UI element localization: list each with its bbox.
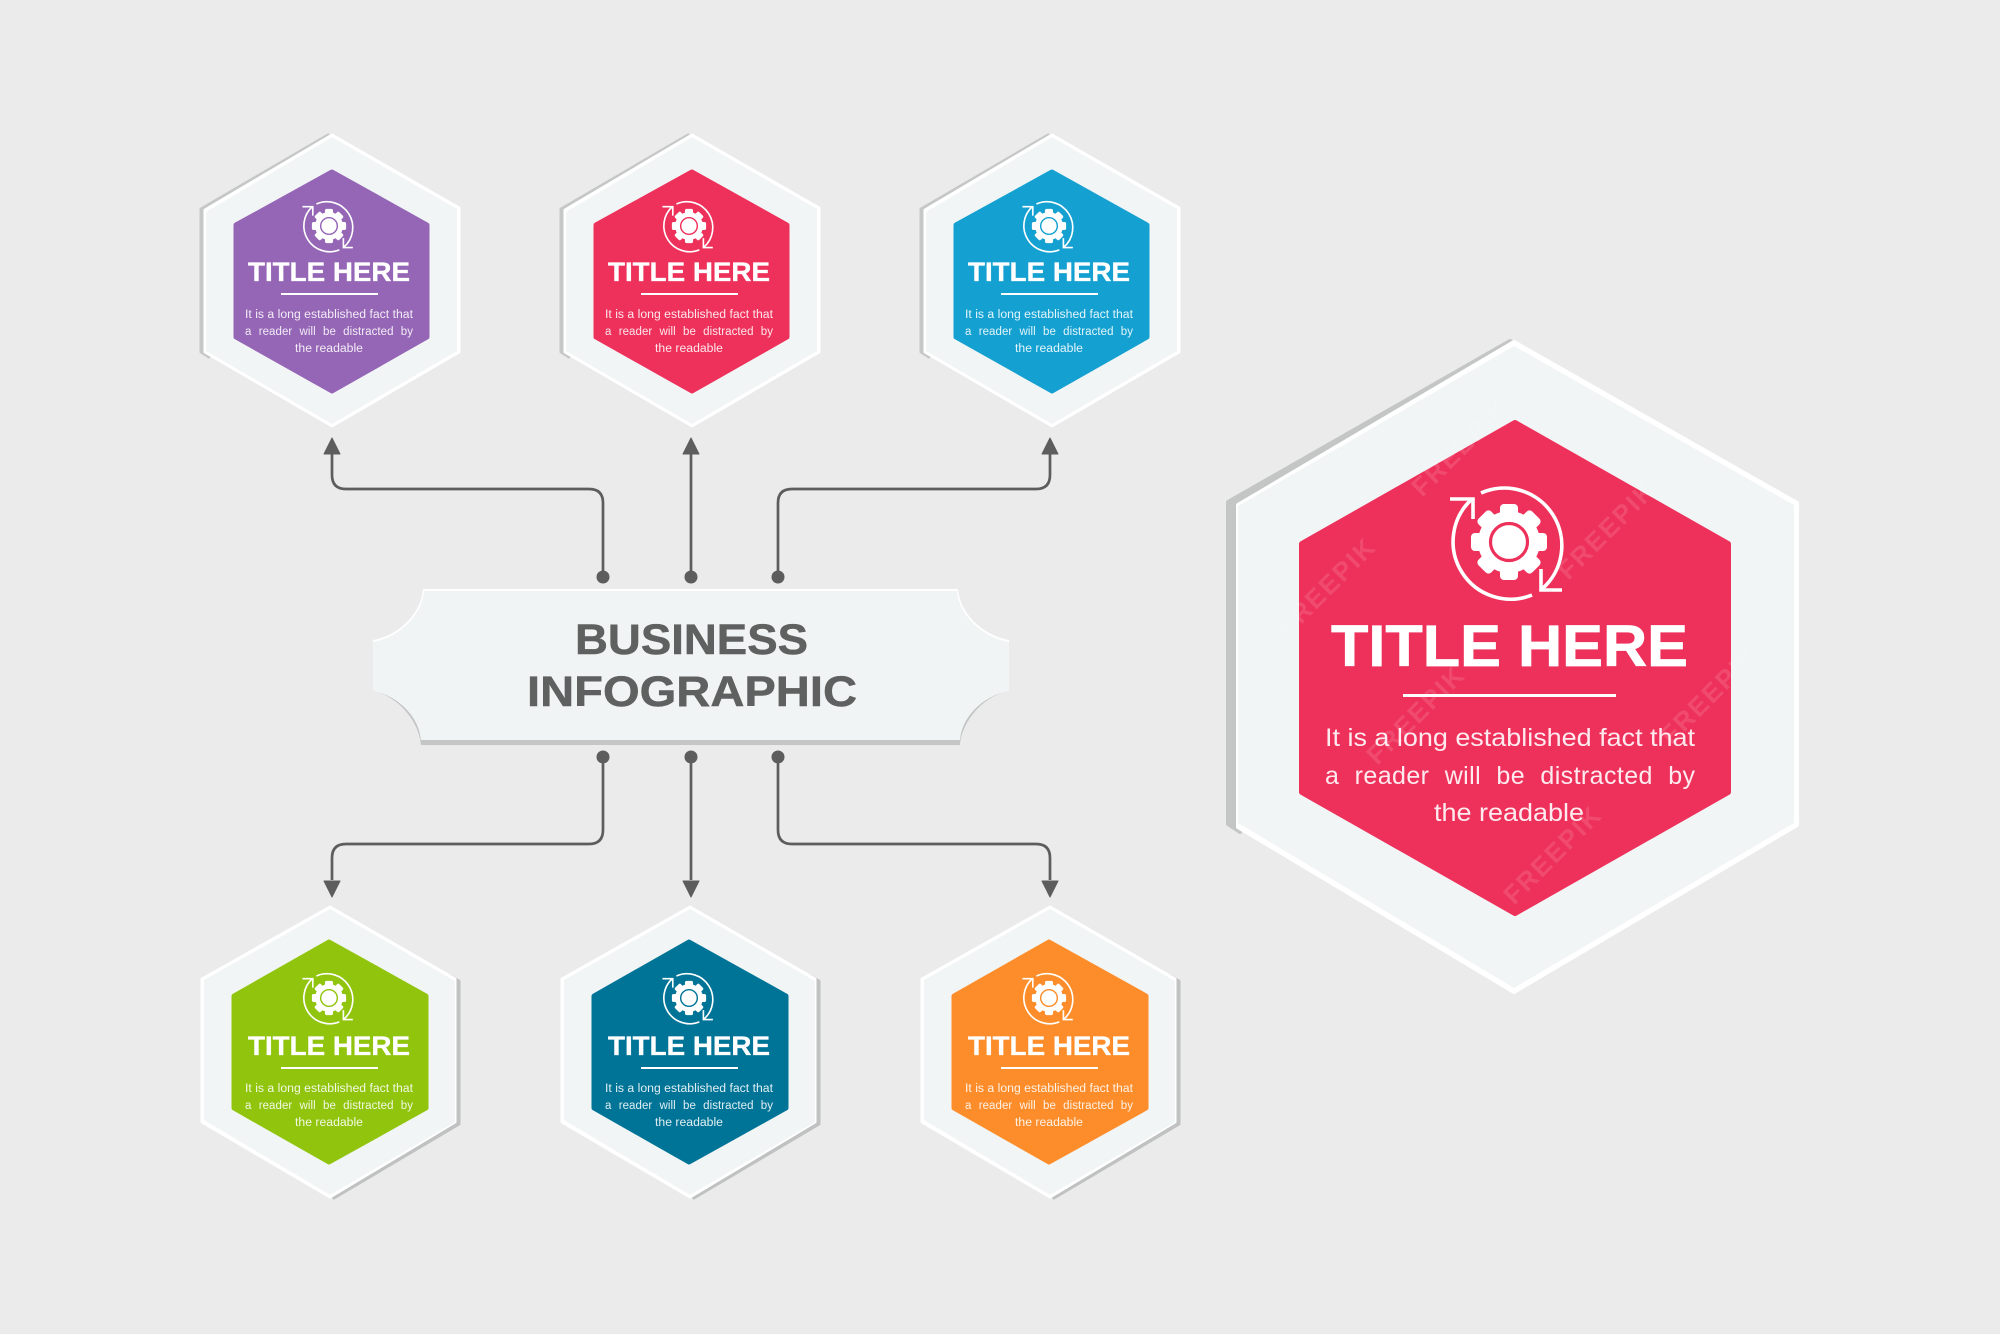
body text [605,309,774,355]
body text [965,1083,1134,1129]
title: TITLE HERE [608,1031,770,1061]
watermark: FREEPIK [1551,474,1662,585]
icon: gear with arrows [302,202,353,252]
divider [1403,694,1616,697]
title: TITLE HERE [248,1031,410,1061]
divider [641,1067,738,1069]
panel: red hexagon [561,135,819,426]
body text: the readable [295,343,363,355]
banner title: BUSINESS [575,616,808,664]
panel: large red hexagon [1228,341,1797,992]
connector: top left arrow [324,438,610,584]
banner title: INFOGRAPHIC [527,668,857,716]
panel: green hexagon [202,907,459,1198]
body text [965,309,1134,355]
body text: It is a long established fact that [1325,724,1695,752]
body text: It is a long established fact that [245,1083,414,1095]
connector: top right arrow [772,438,1058,584]
body text: a reader will be distracted by [245,1100,413,1112]
icon: gear with arrows [302,974,353,1024]
divider [1001,293,1098,295]
connector: bottom right arrow [772,750,1058,897]
watermark [1271,391,1765,910]
icon: gear with arrows [1450,488,1562,599]
icon: gear with arrows [662,202,713,252]
icon: gear with arrows [1022,202,1073,252]
panel: purple hexagon [201,135,459,426]
title: TITLE HERE [968,1031,1130,1061]
body text: a reader will be distracted by [605,326,773,338]
divider [281,1067,378,1069]
title: TITLE HERE [248,257,410,287]
body text: It is a long established fact that [605,1083,774,1095]
icon: gear with arrows [662,974,713,1024]
body text [1325,724,1696,827]
watermark: FREEPIK [1497,799,1608,910]
body text: a reader will be distracted by [965,326,1133,338]
connector: top middle arrow [683,438,699,584]
divider [281,293,378,295]
body text [605,1083,774,1129]
body text: the readable [1434,799,1584,827]
body text: a reader will be distracted by [1325,762,1696,790]
body text: It is a long established fact that [245,309,414,321]
body text: the readable [1015,343,1083,355]
body text: the readable [295,1117,363,1129]
divider [641,293,738,295]
body text: a reader will be distracted by [245,326,413,338]
watermark: FREEPIK [1654,639,1765,750]
body text: the readable [655,1117,723,1129]
body text [245,309,414,355]
title: TITLE HERE [1331,614,1688,679]
watermark: FREEPIK [1271,531,1382,642]
connector: bottom middle arrow [683,750,699,897]
body text: the readable [1015,1117,1083,1129]
panel: orange hexagon [922,907,1179,1198]
body text: It is a long established fact that [965,1083,1134,1095]
body text: the readable [655,343,723,355]
body text: It is a long established fact that [605,309,774,321]
body text [245,1083,414,1129]
panel: blue hexagon [921,135,1179,426]
connector: bottom left arrow [324,750,610,897]
banner title [527,616,857,716]
watermark: FREEPIK [1360,659,1471,770]
title: TITLE HERE [608,257,770,287]
panel: teal hexagon [562,907,819,1198]
body text: It is a long established fact that [965,309,1134,321]
watermark: FREEPIK [1405,391,1516,502]
body text: a reader will be distracted by [965,1100,1133,1112]
title: TITLE HERE [968,257,1130,287]
divider [1001,1067,1098,1069]
central banner [373,589,1009,745]
icon: gear with arrows [1022,974,1073,1024]
body text: a reader will be distracted by [605,1100,773,1112]
